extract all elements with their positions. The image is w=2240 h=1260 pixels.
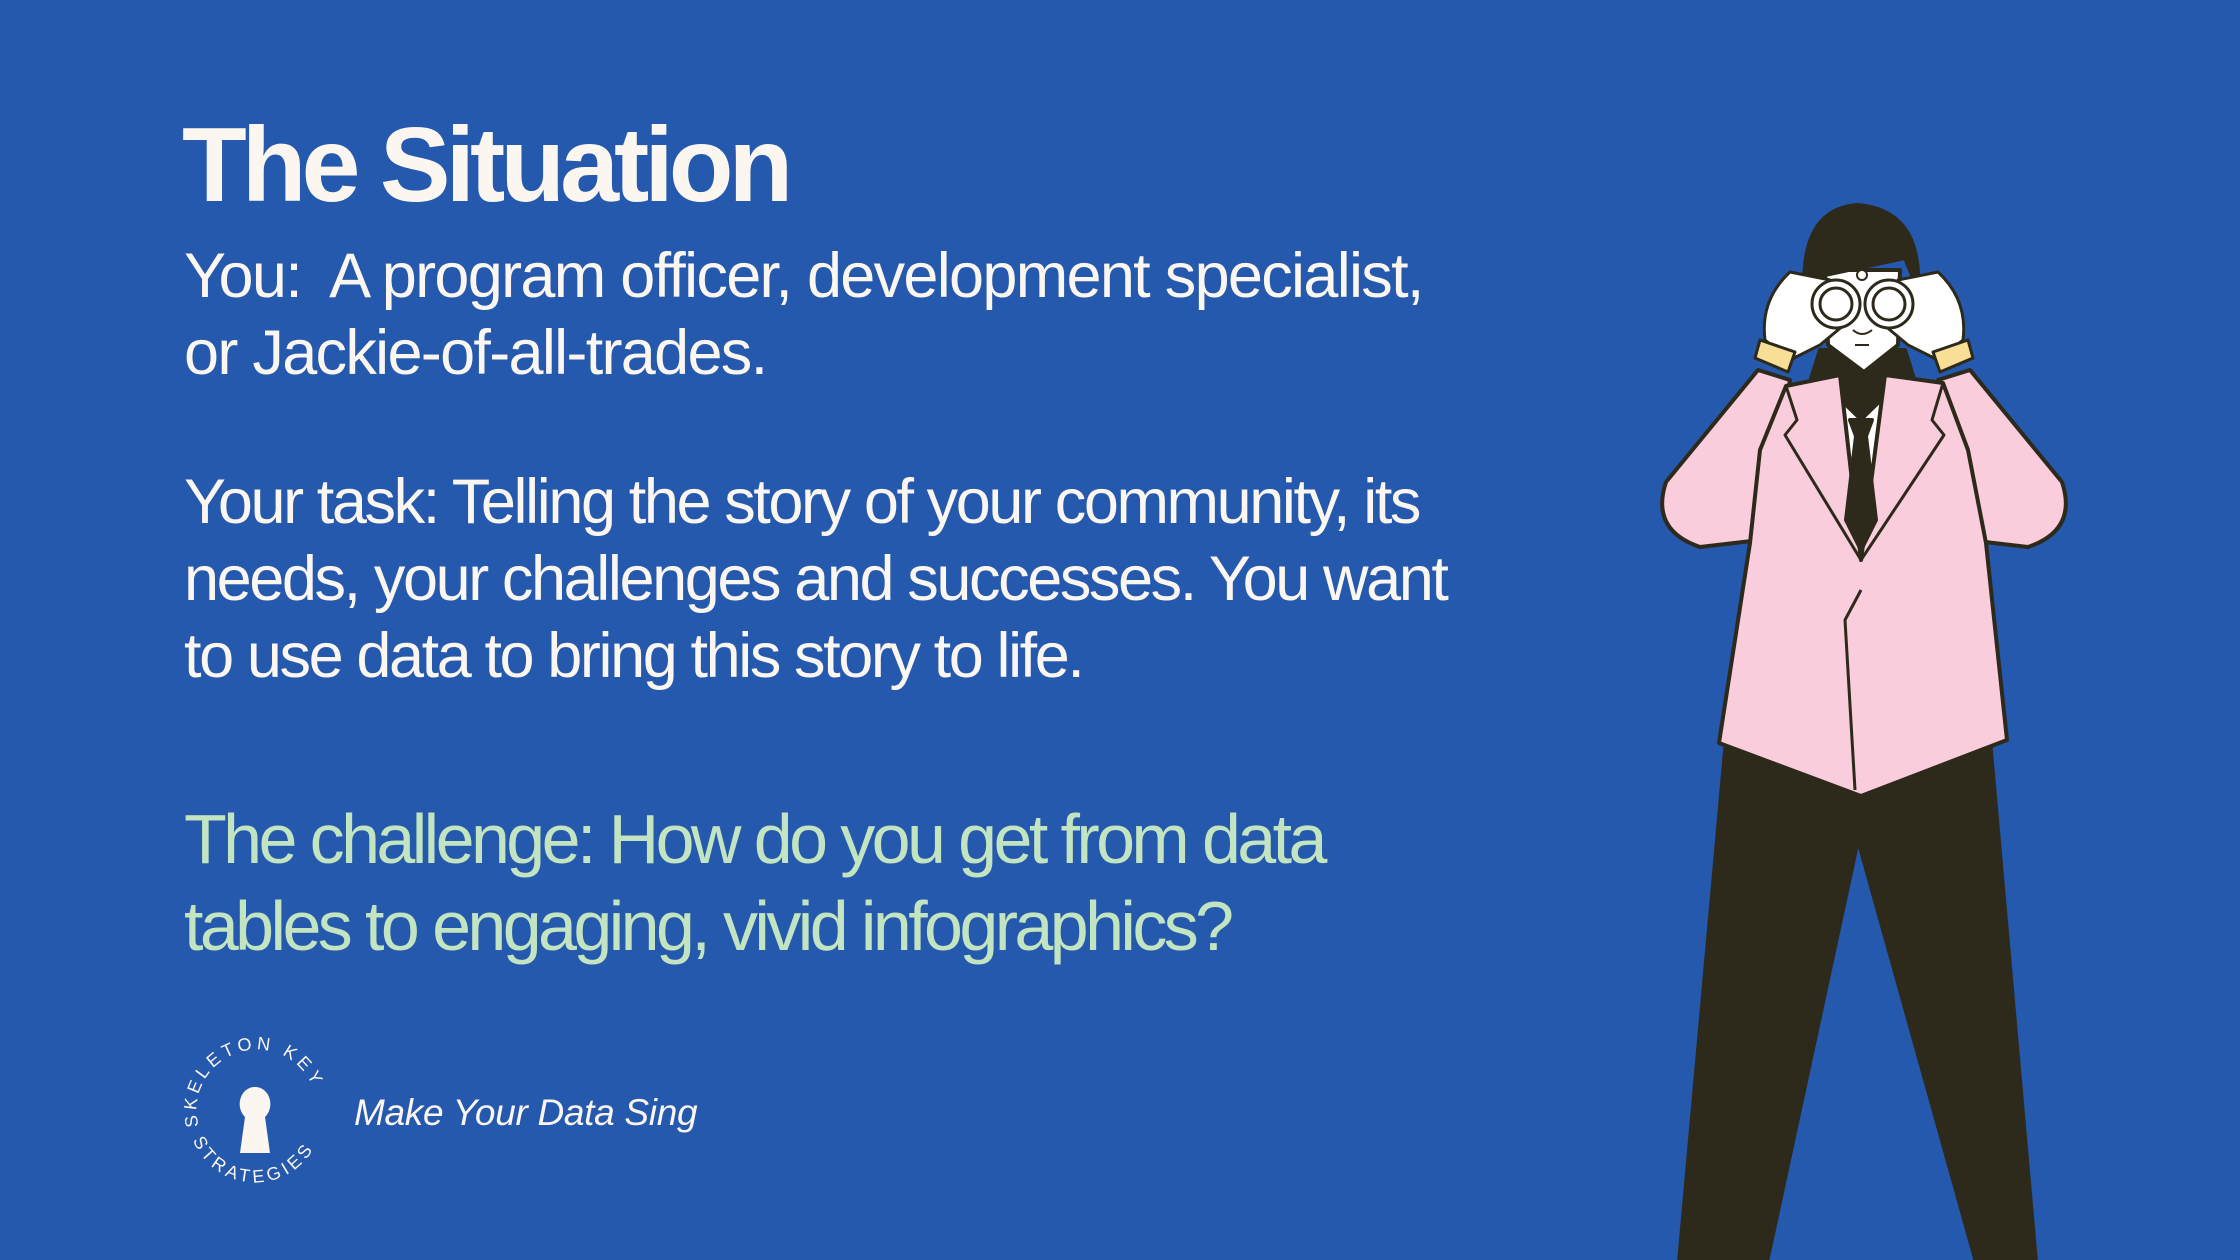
- cuffs: [1755, 340, 1795, 372]
- text block: you: You: A program officer, development specialist,: [184, 241, 1423, 311]
- logo: skeleton key strategies: [184, 1036, 324, 1183]
- text block: your task: [184, 467, 1448, 691]
- text block: challenge: tables to engaging, vivid infographics?: [184, 887, 1230, 965]
- hands: [1764, 272, 1850, 360]
- binoculars: [1812, 280, 1860, 328]
- text block: your task: to use data to bring this story to life.: [184, 621, 1083, 691]
- logo: skeleton key strategies: STRATEGIES: [194, 1136, 311, 1183]
- text block: you: [184, 241, 1423, 388]
- neck/shirt: [1795, 350, 1930, 560]
- logo: skeleton key strategies: SKELETON KEY: [184, 1036, 324, 1126]
- text block: your task: Your task: Telling the story of your community, its: [184, 467, 1419, 537]
- text block: your task: needs, your challenges and successes. You want: [184, 544, 1447, 614]
- pants: [1679, 740, 2036, 1260]
- text block: challenge: The challenge: How do you get from data: [184, 800, 1324, 878]
- arms: [1662, 370, 1790, 547]
- tie: [1846, 420, 1876, 550]
- title: The Situation: [182, 106, 788, 224]
- hair: [1804, 205, 1918, 300]
- tagline: Make Your Data Sing: [354, 1092, 697, 1133]
- jacket: [1719, 375, 2007, 796]
- face: [1825, 270, 1900, 372]
- text block: challenge: [184, 800, 1328, 965]
- text block: you: or Jackie-of-all-trades.: [184, 318, 766, 388]
